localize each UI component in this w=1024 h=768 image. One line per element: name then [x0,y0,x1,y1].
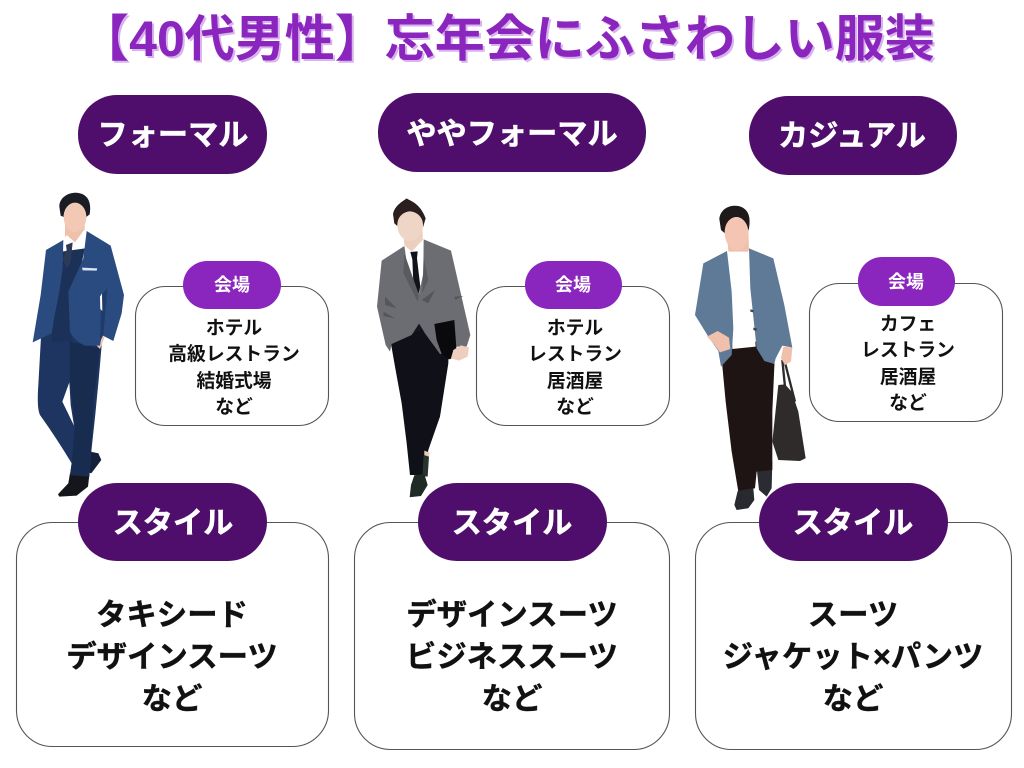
venue list: formal: 高級レストラン [168,343,300,364]
venue list: formal: 結婚式場 [196,370,272,391]
style label: semi-formal [418,483,607,561]
figure: man in blue-grey jacket with bag [695,206,806,510]
venue label: formal [183,261,281,309]
venue list: semi-formal: ホテル [547,317,603,338]
style list: semi-formal [406,597,618,716]
style list: casual: スーツ [808,598,898,632]
venue list: formal: ホテル [206,317,262,338]
venue label: semi-formal [525,261,622,309]
style list: semi-formal: ビジネススーツ [406,640,618,674]
venue list: semi-formal: 居酒屋 [547,370,603,391]
heading: formal: フォーマル [98,119,248,152]
style list: semi-formal: など [482,682,542,716]
style list: formal: など [142,682,202,716]
heading: semi-formal: ややフォーマル [406,118,618,151]
title: 【40代男性】忘年会にふさわしい服装 [81,13,937,69]
heading: casual: カジュアル [778,120,926,153]
heading: semi-formal [378,93,646,172]
venue label: casual: 会場 [888,272,924,292]
venue list: casual: など [889,392,927,413]
heading: casual [749,96,957,175]
figure: man in grey jacket with black trousers [377,198,470,497]
venue list: formal: など [215,396,253,417]
venue list: semi-formal: レストラン [528,343,622,364]
panel: formal venues [136,261,328,426]
venue label: casual [858,257,955,306]
venue list: semi-formal: など [556,396,594,417]
venue label: formal: 会場 [214,275,250,295]
panel: semi-formal styles [354,483,670,750]
style list: casual [723,598,983,716]
style list: formal [66,598,278,716]
style list: semi-formal: デザインスーツ [406,597,618,632]
venue list: semi-formal [528,317,622,417]
venue list: formal [168,317,300,417]
venue list: casual [861,313,955,413]
heading: formal [78,95,267,174]
title: 【40代男性】忘年会にふさわしい服装 [79,11,935,67]
venue label: semi-formal: 会場 [555,275,591,295]
style list: casual: など [823,682,883,716]
venue list: casual: 居酒屋 [880,366,936,387]
style list: formal: タキシード [96,598,248,632]
venue list: casual: カフェ [880,313,936,334]
style list: formal: デザインスーツ [66,639,278,674]
panel: semi-formal venues [476,261,670,426]
venue list: casual: レストラン [861,339,955,360]
panel: casual venues [810,257,1002,422]
style label: semi-formal: スタイル [452,506,572,540]
style label: formal [78,483,267,561]
style list: casual: ジャケット×パンツ [723,640,983,674]
style label: casual: スタイル [793,506,913,540]
style label: formal: スタイル [113,506,233,540]
panel: casual styles [696,483,1012,750]
style label: casual [759,483,948,561]
panel: formal styles [16,483,328,746]
figure: man in navy three-piece suit [33,193,124,497]
